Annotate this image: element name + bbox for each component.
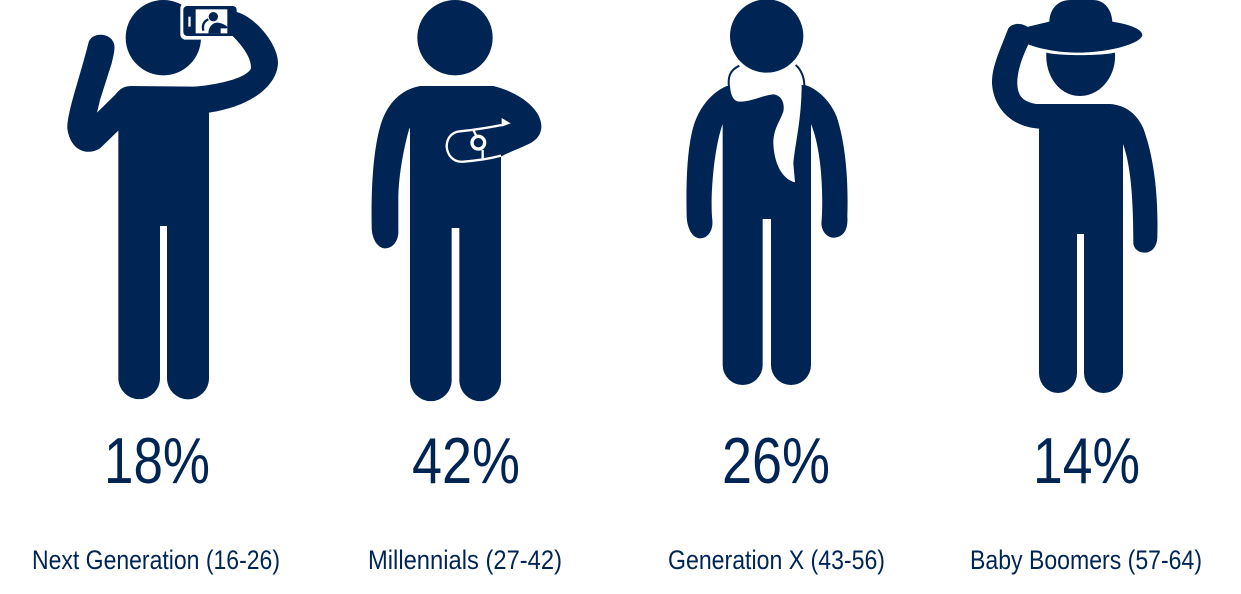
icon: person wearing a scarf: [686, 0, 848, 385]
label: Generation X (43-56): [668, 545, 885, 575]
percentage 42%: 42%: [412, 424, 520, 497]
icon: phone: [180, 3, 237, 40]
panel: Millennials: [368, 0, 562, 575]
label: Next Generation (16-26): [32, 545, 280, 575]
body with bent arm: [372, 86, 541, 401]
head: [730, 0, 803, 73]
scarf neck outline: [729, 65, 804, 87]
scarf: [730, 83, 802, 182]
label: Baby Boomers (57-64): [970, 545, 1202, 575]
percentage 18%: 18%: [104, 424, 210, 497]
head: [417, 0, 493, 75]
icon: person taking a selfie: [67, 0, 278, 399]
body with raised arms: [67, 12, 278, 399]
head: [126, 0, 201, 75]
percentage 14%: 14%: [1033, 424, 1140, 497]
panel: Baby Boomers: [970, 0, 1202, 575]
body with raised arm: [992, 24, 1157, 393]
head: [1046, 53, 1115, 96]
icon: person tipping a hat: [992, 0, 1157, 393]
panel: Next Generation: [32, 0, 280, 575]
icon: wristwatch outline: [447, 118, 511, 162]
percentage 26%: 26%: [722, 424, 830, 497]
body: [686, 85, 848, 385]
icon: person checking a watch: [372, 0, 541, 401]
panel: Generation X: [668, 0, 885, 575]
label: Millennials (27-42): [368, 545, 562, 575]
hat: [1028, 0, 1142, 53]
